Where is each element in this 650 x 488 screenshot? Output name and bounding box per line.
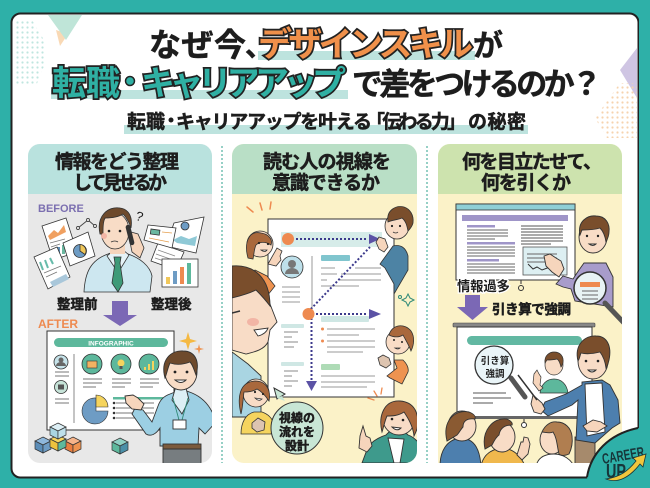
audience [440,411,574,466]
panel 1 heading [55,151,179,194]
panel: what to emphasize [438,144,624,467]
title: 転職 [52,65,120,103]
infographic board: INFOGRAPHIC [88,340,134,348]
stand under browser [520,280,522,284]
projector screen: 引き算 [481,355,510,367]
badge: career up: CAREER [601,444,645,467]
decoration: right shapes [595,48,637,138]
title: なぜ今 [149,27,246,63]
person: large man at left [232,266,277,417]
title: デザインスキル [258,25,473,64]
panel: information organizing [28,144,216,467]
person: man in blue top right [376,207,413,294]
person: presenter in blue jacket [518,336,620,467]
panel: reader's gaze [232,144,424,463]
pendant under screen [524,419,525,422]
badge: career up: UP [606,460,626,483]
panel 2 heading: 意識できるか [272,171,380,194]
person: confused man [84,208,152,292]
person: woman in teal jacket [359,401,424,463]
browser window overloaded with text [456,204,575,280]
label: emphasize by subtraction: 引き算で強調 [492,301,571,317]
projector screen: 強調 [485,368,505,380]
callout: gaze design: 視線の [279,410,315,425]
title: が [473,29,503,63]
title: キャリアアップ [141,65,346,103]
icon: emphasis marks top left [247,202,271,212]
subtitle: 転職 [127,111,165,133]
panel 1 heading: 情報をどう整理 [55,151,179,173]
panel 1 heading: して見せるか [73,173,167,194]
label: too much information: 情報過多 [457,278,510,294]
dotted dividers [221,146,223,463]
person: presenter man [125,351,216,467]
person: man in purple shirt [544,216,613,307]
document with gaze flow [268,219,394,397]
panel 3 heading: 何を引くか [481,172,571,194]
AFTER label: AFTER [38,317,78,331]
callout: gaze design: 設計 [285,438,309,453]
BEFORE label: BEFORE [38,203,84,215]
decoration: top left shapes [14,15,82,86]
infographic board [47,331,174,430]
arrow: before to after [103,301,137,326]
arrow: subtract [457,295,488,320]
icon: network nodes [76,218,96,230]
person: woman in yellow [239,379,274,434]
person on screen [533,352,568,393]
callout: gaze design: 流れを [279,424,315,439]
panel 2 heading: 読む人の視線を [263,151,391,173]
person: woman in orange top left [246,230,282,294]
icon: colored cubes [35,423,128,454]
panel 2 heading [263,151,391,194]
arrow labels [57,296,192,312]
arrow labels: 整理前 [57,296,98,312]
icon: messy documents right [144,217,204,287]
icon: sparkles [179,332,204,354]
panel 3 heading: 何を目立たせて、 [462,151,602,173]
subtitle: の秘密 [468,111,526,133]
icon: emphasis marks bottom right [368,388,382,400]
icon: messy documents left [34,218,95,289]
projector screen [453,323,595,419]
subtitle: 「伝わる力」 [366,111,466,133]
person: woman in orange right [378,326,414,384]
icon: question mark: ? [134,208,145,225]
subtitle: キャリアアップを叶える [176,111,372,133]
panel 3 heading [462,152,590,192]
subtitle [124,111,528,134]
icon: rising arrow [606,454,646,481]
icon: sparkles right [398,294,414,306]
arrow labels: 整理後 [151,296,192,312]
title: 、 [245,31,273,62]
icon: magnifier on text [574,272,624,323]
title [51,25,602,103]
callout: gaze design [271,388,323,454]
title: で差をつけるのか？ [352,67,602,102]
badge: career up [587,8,650,488]
